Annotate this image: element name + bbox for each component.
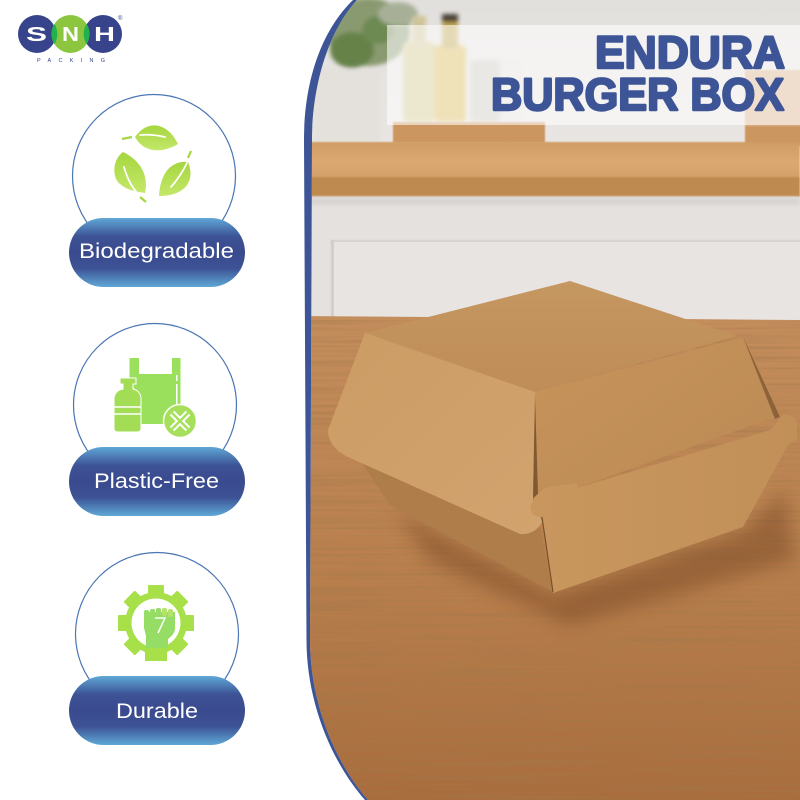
bottles bbox=[402, 10, 500, 122]
logo: SNH Packing: H bbox=[94, 24, 115, 46]
box flap crease bbox=[542, 517, 553, 592]
box right face bbox=[533, 337, 775, 497]
pill label bbox=[69, 676, 245, 745]
circle outline bbox=[76, 552, 238, 716]
icon: three leaves bbox=[114, 125, 191, 202]
photo: burger box on a wooden table bbox=[300, 0, 800, 800]
pill label bbox=[69, 447, 245, 516]
pill label: Biodegradable bbox=[79, 240, 234, 263]
title: BURGER BOX bbox=[491, 69, 784, 120]
icon: fist in gear bbox=[118, 585, 194, 661]
box front flap bbox=[530, 415, 797, 593]
kitchen wall bbox=[300, 0, 800, 145]
cabinet bbox=[300, 197, 800, 322]
table top bbox=[300, 316, 800, 800]
plant in pot bbox=[327, 0, 420, 71]
pill label: Durable bbox=[116, 700, 198, 723]
wooden shelf bbox=[300, 142, 800, 197]
box top lid bbox=[365, 281, 737, 392]
circle outline bbox=[74, 324, 236, 486]
icon: bag and bottle crossed out bbox=[114, 358, 196, 438]
circle outline bbox=[72, 94, 236, 258]
feature: biodegradable bbox=[69, 94, 245, 287]
box lower left side bbox=[362, 463, 553, 592]
pill label bbox=[69, 218, 245, 287]
tray and wood block bbox=[393, 70, 800, 146]
feature: plastic-free bbox=[69, 324, 245, 516]
title bbox=[491, 27, 785, 120]
feature: durable bbox=[69, 552, 245, 745]
logo: SNH Packing: PACKING bbox=[37, 58, 105, 64]
curved blue divider bbox=[304, 0, 368, 800]
logo: SNH Packing: ® bbox=[118, 15, 123, 22]
logo: SNH Packing: N bbox=[62, 24, 79, 46]
title band bbox=[387, 25, 800, 125]
box shadow bbox=[395, 490, 795, 625]
title: ENDURA bbox=[595, 27, 785, 78]
box left flap bbox=[328, 333, 542, 534]
box centre fold bbox=[533, 396, 538, 498]
logo: SNH Packing bbox=[18, 15, 123, 64]
pill label: Plastic-Free bbox=[94, 470, 219, 493]
logo: SNH Packing: S bbox=[26, 24, 47, 46]
box rear edge bbox=[743, 337, 780, 419]
